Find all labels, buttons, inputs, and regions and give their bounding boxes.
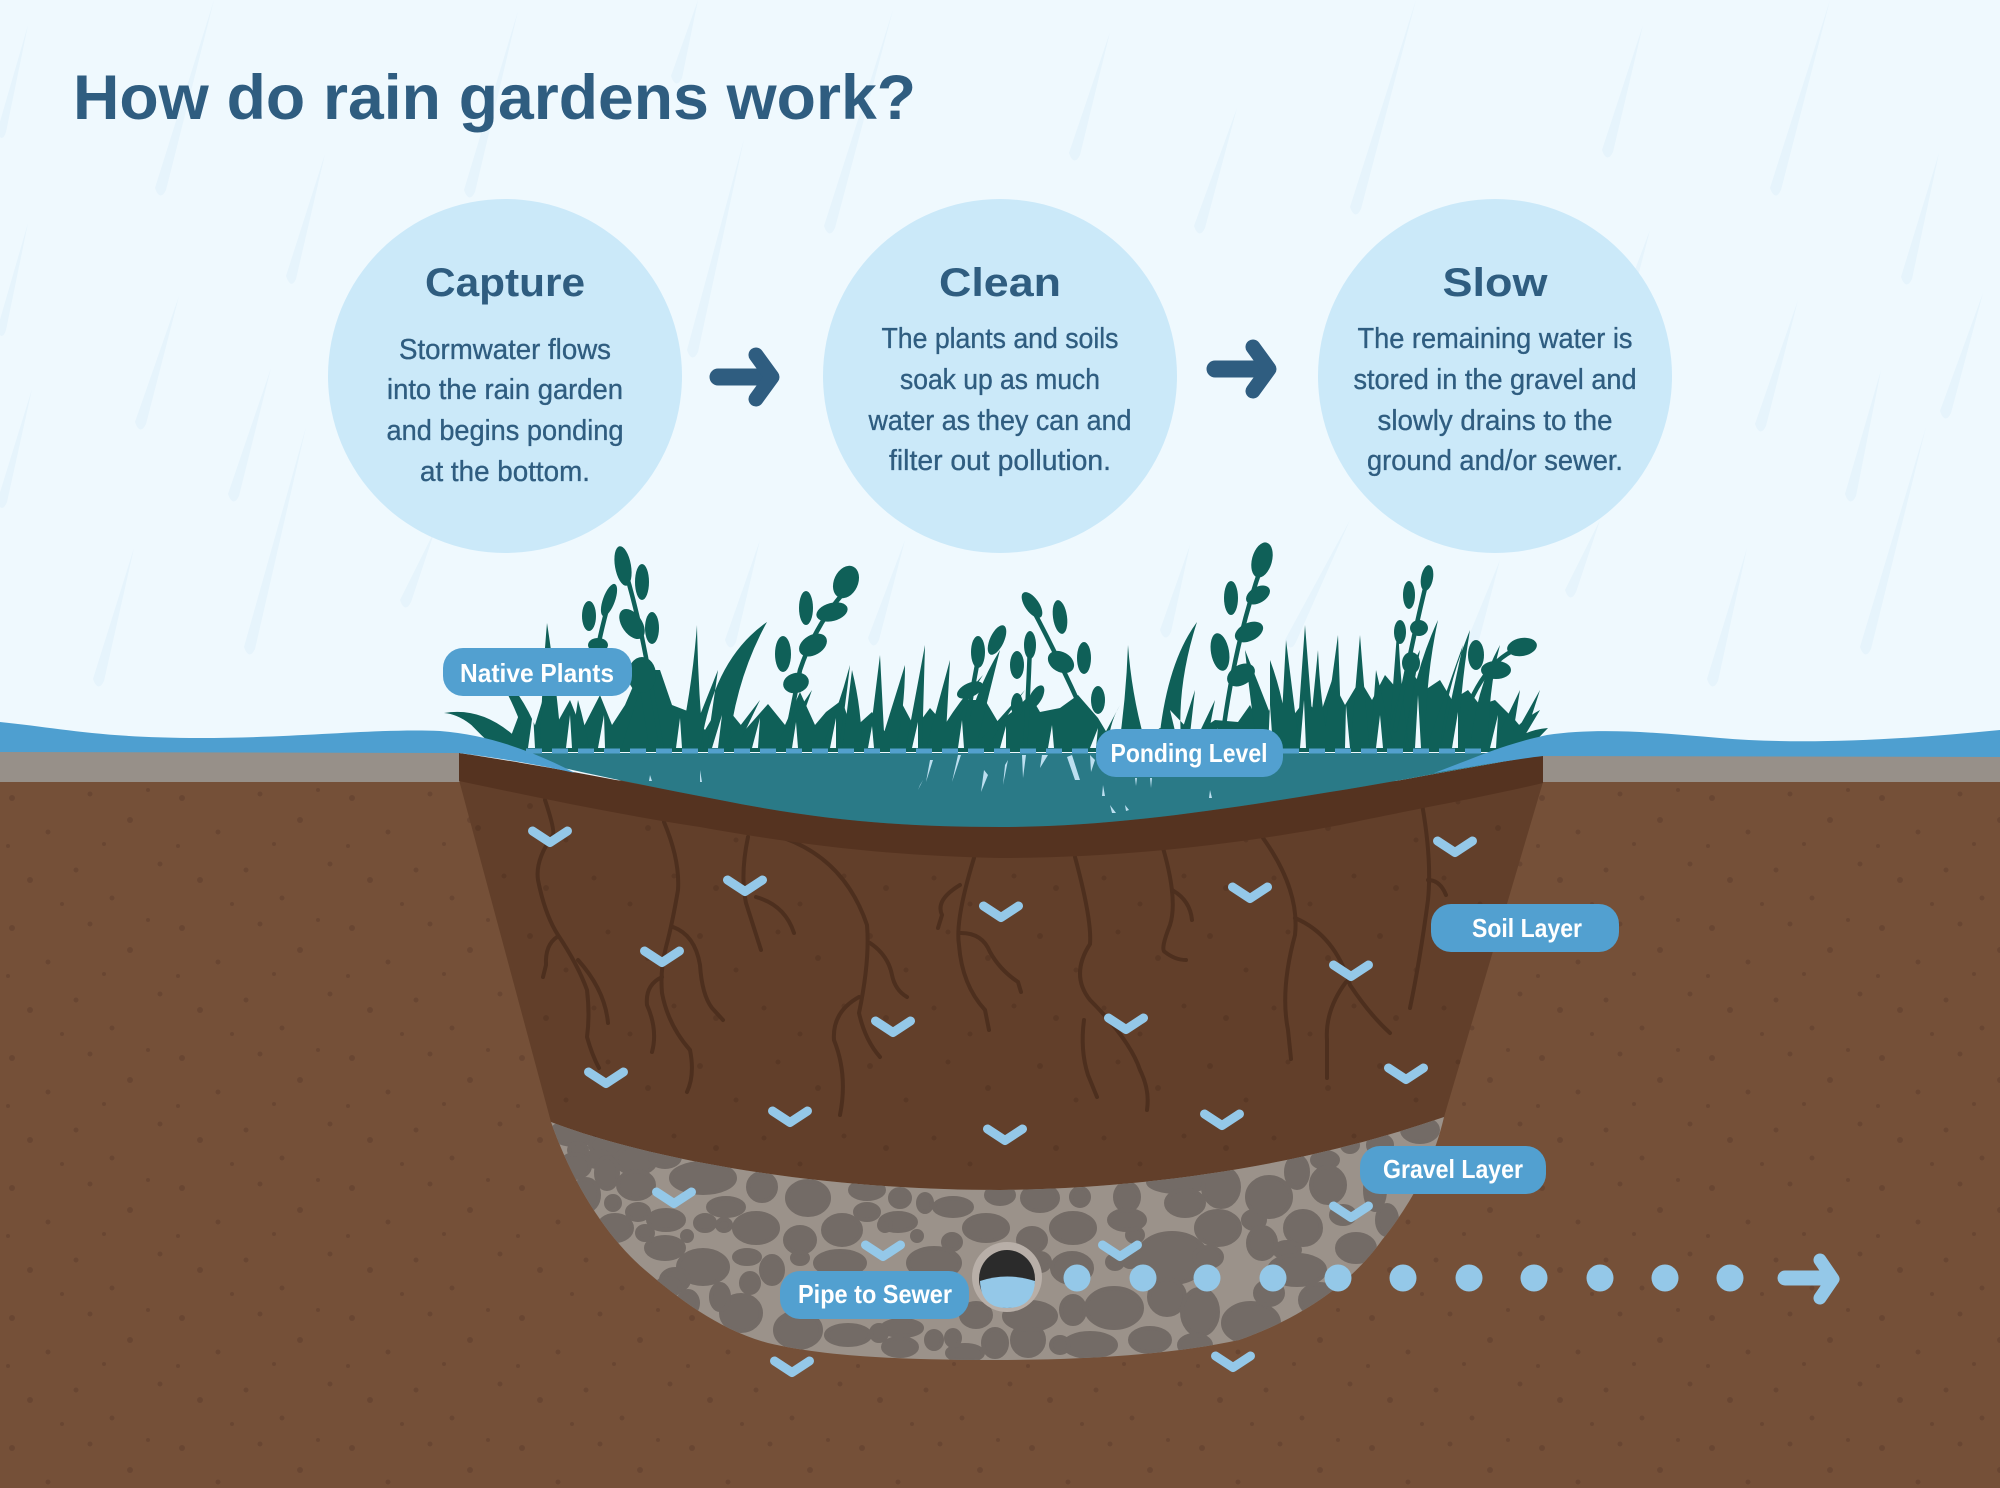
label: ponding level xyxy=(1096,729,1283,777)
clean body text: soak up as much xyxy=(900,364,1100,396)
slow body text: slowly drains to the xyxy=(1378,405,1612,437)
slow body text: ground and/or sewer. xyxy=(1367,445,1623,477)
pipe outflow dots xyxy=(1064,1264,1744,1292)
surface runoff left xyxy=(0,722,575,773)
label: native plants xyxy=(443,648,632,696)
light gaps between blades xyxy=(528,695,1498,748)
water flow chevrons xyxy=(532,831,1472,1372)
clean heading: Clean xyxy=(939,261,1061,305)
clean body text: water as they can and xyxy=(868,405,1132,437)
arrow: capture to clean xyxy=(718,355,772,399)
slow heading: Slow xyxy=(1442,261,1548,305)
slow body text xyxy=(1354,323,1636,477)
soil layer xyxy=(459,780,1543,1190)
pipe to sewer xyxy=(972,1242,1042,1312)
label: gravel layer: Gravel Layer xyxy=(1383,1154,1523,1184)
reflections in water xyxy=(649,755,1212,813)
label: ponding level: Ponding Level xyxy=(1110,738,1268,768)
leaves xyxy=(582,540,1538,717)
capture body text: and begins ponding xyxy=(386,415,624,447)
surface runoff right xyxy=(1434,730,2000,773)
label: pipe to sewer xyxy=(780,1271,969,1319)
capture body text: at the bottom. xyxy=(420,456,590,488)
gravel pebbles xyxy=(551,1118,1438,1361)
surrounding soil xyxy=(0,781,2000,1488)
clean body text xyxy=(868,323,1132,477)
panel: capture xyxy=(328,199,682,553)
label: soil layer xyxy=(1431,904,1619,952)
label: native plants: Native Plants xyxy=(460,658,614,688)
grass blades xyxy=(444,620,1548,752)
flowering stalks xyxy=(590,565,1522,750)
panel: slow xyxy=(1318,199,1672,553)
label: soil layer: Soil Layer xyxy=(1472,913,1582,943)
native plants xyxy=(444,540,1550,752)
slow circle xyxy=(1318,199,1672,553)
gravel layer xyxy=(551,1117,1444,1361)
capture heading: Capture xyxy=(425,261,585,305)
compacted soil band xyxy=(459,753,1543,858)
slow body text: stored in the gravel and xyxy=(1354,364,1636,396)
clean circle xyxy=(823,199,1177,553)
panel: clean xyxy=(823,199,1177,553)
rain streaks xyxy=(0,0,1983,687)
slow body text: The remaining water is xyxy=(1358,323,1632,355)
pipe outflow arrow xyxy=(1785,1260,1833,1298)
clean body text: The plants and soils xyxy=(882,323,1118,355)
capture body text: into the rain garden xyxy=(387,374,623,406)
grass mass xyxy=(505,670,1550,752)
gravel road base bands xyxy=(0,750,2000,782)
label: gravel layer xyxy=(1360,1146,1546,1194)
clean body text: filter out pollution. xyxy=(889,445,1111,477)
ponding water xyxy=(500,753,1543,827)
capture body text: Stormwater flows xyxy=(399,334,611,366)
capture body text xyxy=(386,334,624,488)
title: How do rain gardens work? xyxy=(73,63,916,133)
label: pipe to sewer: Pipe to Sewer xyxy=(798,1279,952,1309)
capture circle xyxy=(328,199,682,553)
arrow: clean to slow xyxy=(1215,347,1269,391)
ponding level dashed line xyxy=(526,748,1490,754)
plant roots xyxy=(538,800,1446,1115)
